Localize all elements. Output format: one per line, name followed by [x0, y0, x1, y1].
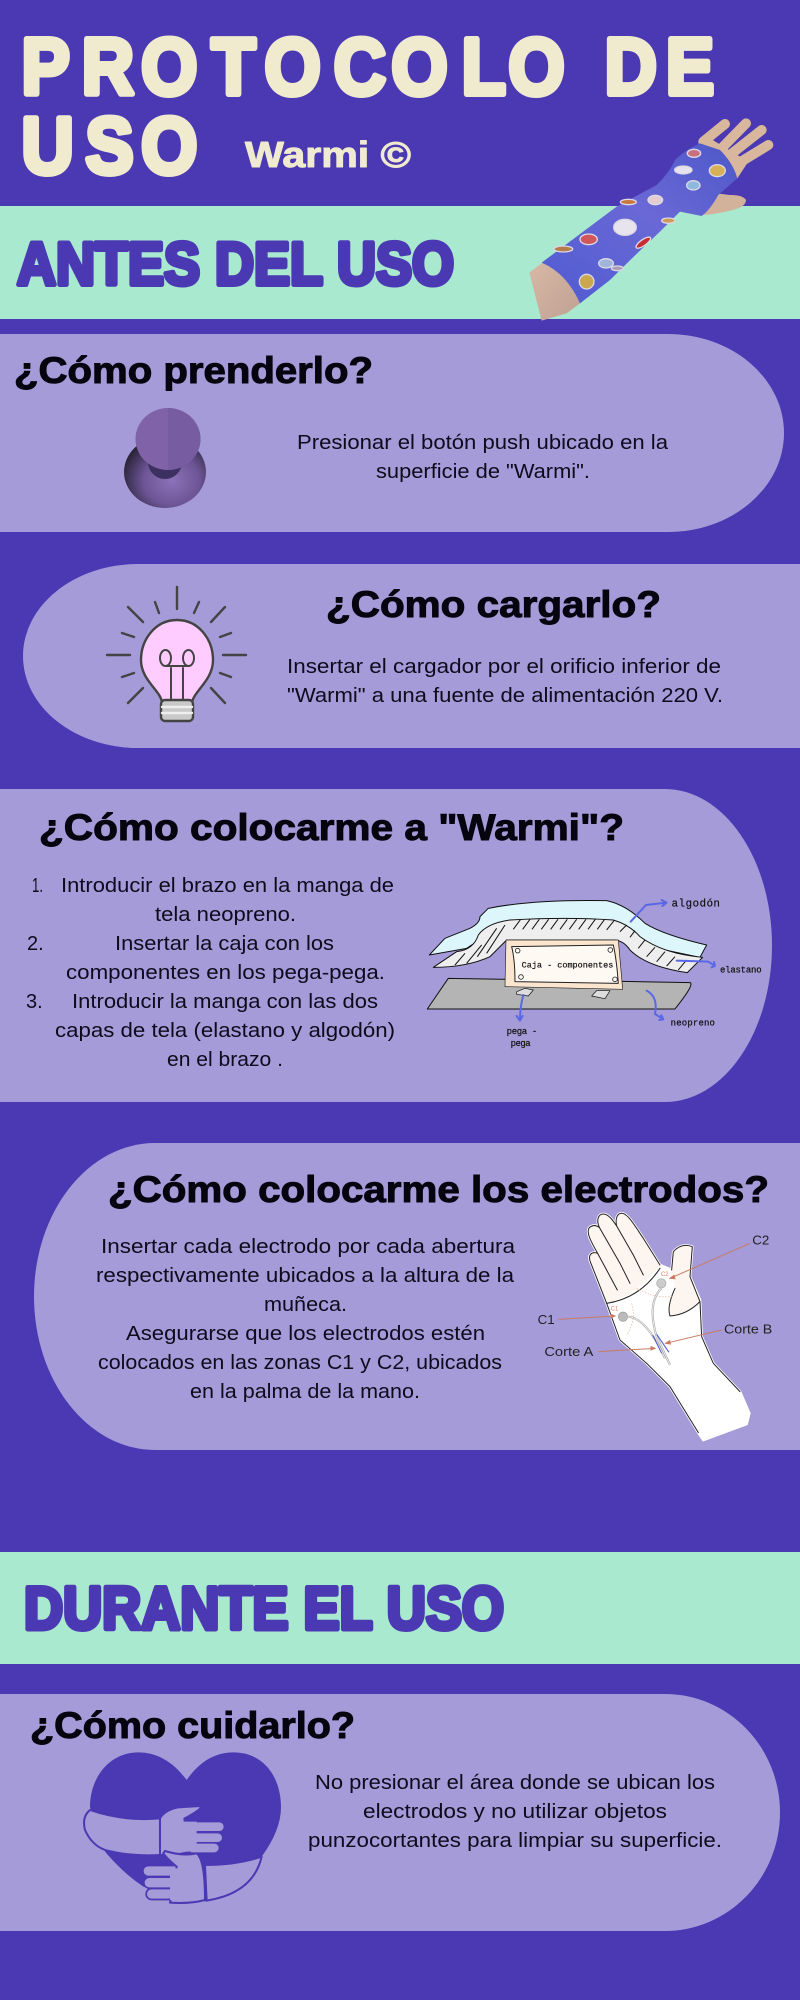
numbered steps: Insertar la caja con los [115, 933, 334, 955]
diagram: sleeve layers [427, 899, 762, 1049]
diagram: glove with electrodes: Corte B [724, 1321, 772, 1336]
title [22, 23, 714, 191]
heading: ¿Cómo cuidarlo? [30, 1705, 355, 1746]
body text: No presionar el área donde se ubican los [315, 1772, 715, 1794]
numbered steps: 3. [26, 991, 43, 1013]
body text: Insertar el cargador por el orificio inferior de [287, 656, 721, 678]
diagram: sleeve layers: neopreno [671, 1019, 715, 1029]
numbered steps: capas de tela (elastano y algodón) [55, 1020, 395, 1042]
heading: ¿Cómo prenderlo? [14, 350, 373, 391]
numbered steps [26, 875, 395, 1071]
body text: Presionar el botón push ubicado en la [297, 432, 669, 454]
panel: como cargarlo [23, 564, 800, 748]
illustration: arm with printed sleeve [529, 123, 768, 321]
panel: como cuidarlo [0, 1694, 780, 1931]
numbered steps: en el brazo . [167, 1049, 283, 1071]
heading: ¿Cómo colocarme los electrodos? [108, 1169, 769, 1210]
numbered steps: Introducir la manga con las dos [72, 991, 378, 1013]
numbered steps: 1. [32, 875, 43, 897]
panel: como colocarme a Warmi [0, 789, 772, 1102]
body text: respectivamente ubicados a la altura de la [96, 1265, 515, 1287]
diagram: glove with electrodes: Corte A [544, 1344, 593, 1359]
numbered steps: tela neopreno. [155, 904, 296, 926]
body text [96, 1236, 516, 1403]
diagram: sleeve layers: pega - [507, 1027, 537, 1037]
icon: heart embraced by hands [84, 1752, 281, 1903]
subtitle: Warmi: Warmi © [245, 134, 411, 175]
body text [308, 1772, 722, 1852]
icon: light bulb [107, 587, 246, 721]
body text: "Warmi" a una fuente de alimentación 220 V. [287, 685, 723, 707]
heading: durante el uso: DURANTE EL USO [24, 1575, 504, 1642]
heading: ¿Cómo colocarme a "Warmi"? [39, 807, 624, 848]
title: USO [22, 102, 197, 191]
heading: ¿Cómo cargarlo? [326, 584, 661, 625]
diagram: glove with electrodes: C2 [752, 1232, 769, 1247]
body text: punzocortantes para limpiar su superficie. [308, 1830, 722, 1852]
section banner: antes del uso [0, 206, 800, 319]
diagram: sleeve layers: pega [511, 1039, 531, 1049]
body text [287, 656, 723, 707]
diagram: glove with electrodes: C1 [538, 1312, 555, 1327]
body text: Asegurarse que los electrodos estén [126, 1323, 485, 1345]
panel: como prenderlo [0, 334, 784, 532]
diagram: sleeve layers: Caja - componentes [522, 960, 613, 970]
body text: muñeca. [264, 1294, 347, 1316]
body text: colocados en las zonas C1 y C2, ubicados [98, 1352, 502, 1374]
title: PROTOCOLO DE [22, 23, 714, 112]
numbered steps: 2. [27, 933, 44, 955]
body text [297, 432, 669, 483]
diagram: sleeve layers: elastano [720, 966, 762, 976]
heading: antes del uso: ANTES DEL USO [17, 230, 454, 298]
diagram: glove with electrodes: C1 [611, 1307, 619, 1313]
diagram: sleeve layers: algodón [672, 899, 720, 911]
numbered steps: Introducir el brazo en la manga de [61, 875, 394, 897]
diagram: glove with electrodes [538, 1213, 772, 1440]
numbered steps: componentes en los pega-pega. [66, 962, 385, 984]
icon: push button [124, 408, 206, 508]
diagram: glove with electrodes: C2 [661, 1272, 669, 1278]
panel: como colocarme los electrodos [34, 1143, 800, 1450]
body text: Insertar cada electrodo por cada abertura [101, 1236, 516, 1258]
section banner: durante el uso [0, 1552, 800, 1664]
body text: superficie de "Warmi". [376, 461, 590, 483]
body text: electrodos y no utilizar objetos [363, 1801, 667, 1823]
body text: en la palma de la mano. [190, 1381, 420, 1403]
